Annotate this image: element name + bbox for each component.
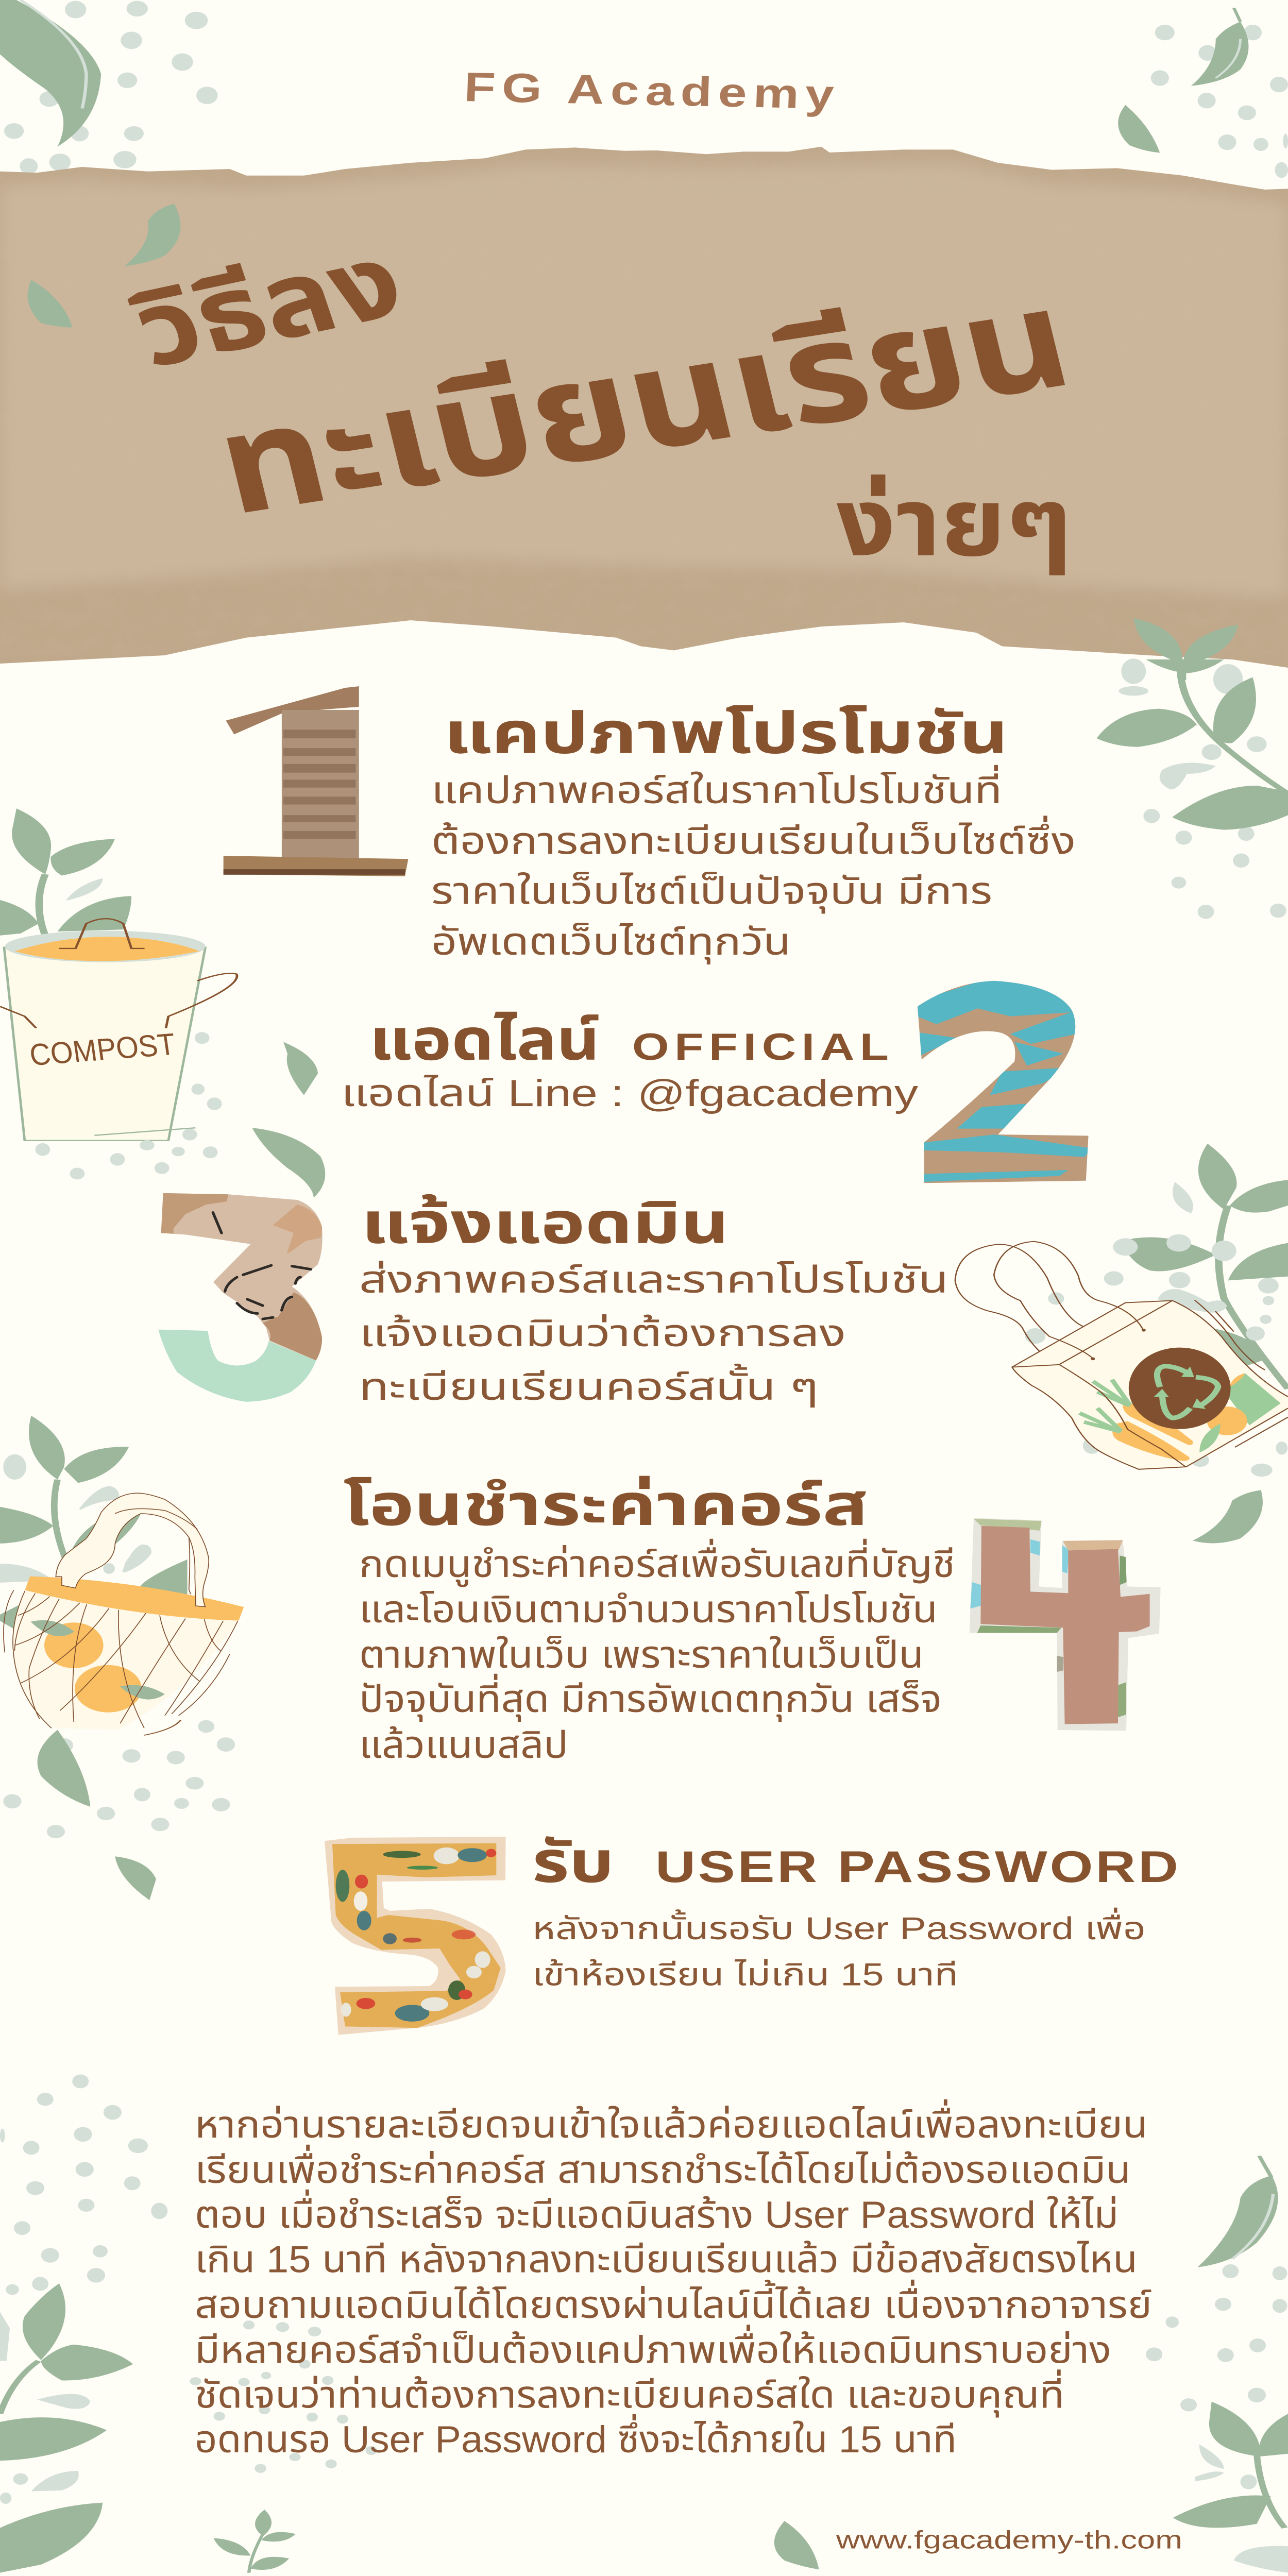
title line 1: วิธีลง xyxy=(120,222,416,389)
number 2 xyxy=(912,977,1093,1186)
text block 4: และโอนเงินตามจำนวนราคาโปรโมชัน xyxy=(359,1588,938,1631)
text block 3 xyxy=(359,1259,948,1408)
decoration: right plant middle xyxy=(1113,1144,1288,1389)
decoration: bottom left dots xyxy=(0,2074,377,2473)
label on compost bag: COMPOST xyxy=(27,1026,178,1072)
text block 4 xyxy=(359,1538,955,1766)
leaf above number 3 xyxy=(252,1128,325,1198)
decoration: bottom right plant xyxy=(1173,2402,1288,2573)
tiny leaf on banner xyxy=(27,280,72,328)
text block 5: เข้าห้องเรียน ไม่เกิน 15 นาที xyxy=(532,1957,958,1992)
title line 2: ทะเบียนเรียน xyxy=(203,261,1084,544)
decoration: top left dots and leaf xyxy=(0,0,218,174)
closing paragraph: เรียนเพื่อชำระค่าคอร์ส สามารถชำระได้โดยไม่ต้องรอแอดมิน xyxy=(195,2144,1131,2191)
closing paragraph: ตอบ เมื่อชำระเสร็จ จะมีแอดมินสร้าง User Password ให้ไม่ xyxy=(195,2189,1118,2236)
decoration: bottom left plant xyxy=(0,2283,133,2573)
heading 4: โอนชำระค่าคอร์ส xyxy=(343,1472,868,1537)
number 5 xyxy=(325,1837,506,2035)
closing paragraph: มีหลายคอร์สจำเป็นต้องแคปภาพเพื่อให้แอดมินทราบอย่าง xyxy=(195,2324,1111,2371)
illustration: eco bag with vegetables xyxy=(955,1242,1288,1477)
heading 5: รับ xyxy=(532,1829,614,1894)
brand heading: FG Academy xyxy=(463,64,835,118)
text block 4: ตามภาพในเว็บ เพราะราคาในเว็บเป็น xyxy=(359,1634,924,1676)
text block 5 xyxy=(532,1907,1146,1992)
text block 3: แจ้งแอดมินว่าต้องการลง xyxy=(359,1312,846,1354)
text block 5: หลังจากนั้นรอรับ User Password เพื่อ xyxy=(532,1907,1146,1946)
closing paragraph: สอบถามแอดมินได้โดยตรงผ่านไลน์นี้ได้เลย เนื่องจากอาจารย์ xyxy=(195,2279,1152,2326)
text block 1: ราคาในเว็บไซต์เป็นปัจจุบัน มีการ xyxy=(431,870,992,914)
heading 5 xyxy=(532,1829,1178,1894)
text block 1 xyxy=(431,765,1076,964)
text block 4: แล้วแนบสลิป xyxy=(359,1724,568,1766)
leaf right side xyxy=(1193,1490,1263,1543)
leaf near website xyxy=(774,2521,819,2569)
decoration: right vine top leaves over banner xyxy=(1133,618,1238,680)
text block 4: กดเมนูชำระค่าคอร์สเพื่อรับเลขที่บัญชี xyxy=(359,1538,955,1587)
text block 1: อัพเดตเว็บไซต์ทุกวัน xyxy=(431,921,791,964)
closing paragraph: เกิน 15 นาที หลังจากลงทะเบียนเรียนแล้ว มีข้อสงสัยตรงไหน xyxy=(195,2238,1138,2280)
heading 3: แจ้งแอดมิน xyxy=(361,1191,729,1256)
heading 1: แคปภาพโปรโมชัน xyxy=(444,701,1008,765)
decoration: dots below net bag xyxy=(3,1720,235,1838)
closing paragraph: หากอ่านรายละเอียดจนเข้าใจแล้วค่อยแอดไลน์เพื่อลงทะเบียน xyxy=(195,2099,1148,2146)
number 3 xyxy=(158,1193,323,1402)
small leaf lower left xyxy=(115,1856,156,1900)
closing paragraph: ชัดเจนว่าท่านต้องการลงทะเบียนคอร์สใด และขอบคุณที่ xyxy=(195,2369,1064,2418)
text block 4: ปัจจุบันที่สุด มีการอัพเดตทุกวัน เสร็จ xyxy=(359,1673,942,1722)
closing paragraph: อดทนรอ User Password ซึ่งจะได้ภายใน 15 นาที xyxy=(195,2414,957,2461)
illustration: net bag with oranges xyxy=(0,1486,244,1730)
heading 2: แอดไลน์ xyxy=(369,1007,600,1072)
text block 3: ส่งภาพคอร์สและราคาโปรโมชัน xyxy=(359,1259,948,1301)
leaf beside step 2 xyxy=(283,1042,318,1095)
decoration: plant behind net bag xyxy=(0,1416,188,1597)
number 1 xyxy=(224,686,408,876)
decoration: top right dots and leaves xyxy=(1118,8,1288,178)
heading 2 xyxy=(369,1007,889,1072)
decoration: net bag strokes xyxy=(144,1720,181,1735)
title line 3: ง่ายๆ xyxy=(836,470,1072,575)
decoration: bottom right leaf xyxy=(1198,2156,1278,2267)
website: www.fgacademy-th.com xyxy=(836,2525,1182,2554)
closing paragraph xyxy=(195,2099,1152,2461)
text block 1: ต้องการลงทะเบียนเรียนในเว็บไซต์ซึ่ง xyxy=(431,816,1076,862)
decoration: right vine top xyxy=(1097,658,1288,919)
text block 2: แอดไลน์ Line : @fgacademy xyxy=(341,1072,918,1114)
decoration: bottom right dots xyxy=(1146,2264,1287,2489)
number 4 xyxy=(970,1518,1161,1731)
heading 2: OFFICIAL xyxy=(632,1026,889,1068)
panel: torn paper banner xyxy=(0,140,1288,676)
decoration: dots under compost bag xyxy=(36,1032,222,1179)
heading 5: USER PASSWORD xyxy=(655,1841,1178,1891)
small leaf on banner xyxy=(125,188,180,266)
text block 3: ทะเบียนเรียนคอร์สนั้น ๆ xyxy=(359,1363,819,1408)
leaf under net bag xyxy=(38,1730,90,1807)
text block 1: แคปภาพคอร์สในราคาโปรโมชันที่ xyxy=(431,765,1002,811)
illustration: compost bag with plant xyxy=(0,808,237,1141)
decoration: small sprig bottom xyxy=(214,2510,296,2573)
